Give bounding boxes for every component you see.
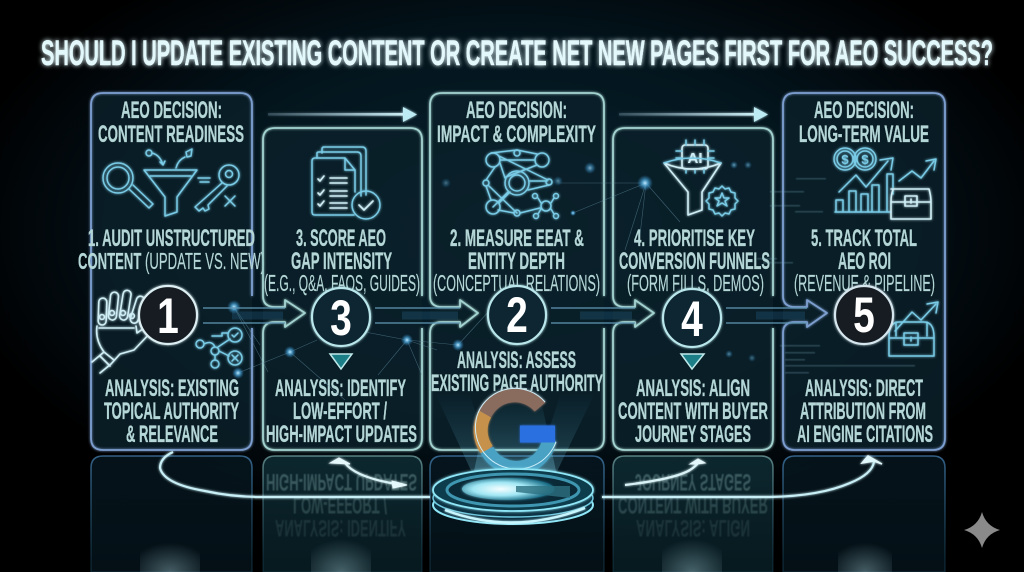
top flow arrow 2: [619, 107, 768, 122]
heading: AEO decision long-term value: [799, 97, 929, 148]
floor reflection of the panels: [91, 456, 945, 572]
analysis text 2: ANALYSIS: ASSESS: [457, 347, 576, 374]
step label 1: [78, 225, 265, 274]
analysis text 1: & RELEVANCE: [126, 421, 218, 448]
analysis text 1: ANALYSIS: EXISTING: [105, 375, 239, 402]
step label 4: CONVERSION FUNNELS: [619, 248, 770, 275]
icon: entity network: [483, 150, 558, 218]
analysis text 2: EXISTING PAGE AUTHORITY: [431, 370, 603, 397]
panel: step 1 content readiness: [78, 93, 265, 450]
analysis text 1: TOPICAL AUTHORITY: [104, 398, 239, 425]
step circle 1: [139, 286, 197, 344]
reflected text: panel 3: HIGH-IMPACT UPDATES: [266, 468, 417, 495]
reflected text: panel 3: ANALYSIS: IDENTIFY: [275, 514, 406, 541]
step circle 1: 1: [157, 287, 179, 344]
panel: step 4 conversion funnels: [613, 128, 773, 450]
step label 3: [264, 225, 420, 296]
triangle marker 4: [681, 354, 704, 369]
connector arrows between circles: [203, 308, 807, 323]
icon: coins, growth chart and chest: $: [861, 152, 869, 167]
heading: AEO decision impact and complexity: IMPACT & COMPLEXITY: [437, 121, 596, 148]
icon: glowing G logo: [475, 388, 556, 469]
heading: AEO decision content readiness: AEO DECISION:: [121, 97, 222, 124]
icon: robot hand: [92, 290, 154, 373]
step circle 3: [312, 288, 370, 346]
heading: AEO decision content readiness: [98, 97, 244, 148]
step circle 4: [663, 289, 721, 347]
reflected text: panel 3: LOW-EFFORT /: [293, 491, 387, 518]
step label 3: 3. SCORE AEO: [296, 225, 386, 252]
analysis text 3: [266, 375, 417, 448]
network lines and nodes: [227, 161, 756, 400]
step label 2: 2. MEASURE EEAT &: [450, 225, 584, 252]
step label 5: 5. TRACK TOTAL: [811, 225, 917, 252]
heading: AEO decision long-term value: LONG-TERM VALUE: [799, 121, 929, 148]
step label 3: (E.G., Q&A, FAQS, GUIDES): [264, 270, 420, 296]
analysis text 5: [797, 375, 933, 448]
analysis text 2: [431, 347, 603, 397]
curved return line right with arrow: [602, 456, 882, 497]
triangle marker 3: [330, 354, 352, 369]
analysis text 5: ANALYSIS: DIRECT: [805, 375, 923, 402]
icon: AI chip funnel and gear: [664, 140, 738, 216]
analysis text 4: JOURNEY STAGES: [635, 421, 751, 448]
step label 1: 1. AUDIT UNSTRUCTURED: [88, 225, 255, 252]
heading: AEO decision long-term value: AEO DECISION:: [814, 97, 914, 124]
reflected text: panel 4: CONTENT WITH BUYER: [618, 491, 768, 518]
icon: treasure chest with trend arrow: [889, 302, 938, 356]
step label 2: ENTITY DEPTH: [468, 248, 565, 275]
step label 2: (CONCEPTUAL RELATIONS): [433, 270, 600, 296]
analysis text 3: ANALYSIS: IDENTIFY: [275, 375, 406, 402]
step label 2: [433, 225, 600, 296]
step label 1: CONTENT (UPDATE VS. NEW): [78, 248, 265, 274]
icon: coins, growth chart and chest: $: [841, 152, 849, 167]
analysis text 4: ANALYSIS: ALIGN: [636, 375, 750, 402]
step label 4: 4. PRIORITISE KEY: [634, 225, 755, 252]
analysis text 1: [104, 375, 239, 448]
reflected text: panel 3: [266, 468, 417, 541]
step circle 2: [488, 286, 546, 344]
top flow arrow 1: [268, 107, 417, 122]
step label 4: [619, 225, 770, 296]
step label 5: [794, 225, 935, 296]
icon: workflow nodes: [196, 328, 242, 368]
icon: four-point sparkle watermark: [964, 512, 1000, 548]
step circle 3: 3: [330, 289, 352, 346]
step label 5: AEO ROI: [838, 248, 891, 275]
icon: coins, growth chart and chest: [834, 148, 936, 219]
heading: AEO decision impact and complexity: AEO DECISION:: [466, 97, 567, 124]
step label 3: GAP INTENSITY: [291, 248, 392, 275]
step circle 5: [835, 286, 893, 344]
reflected text: panel 4: JOURNEY STAGES: [635, 468, 751, 495]
holographic platform: [433, 469, 593, 524]
icon: checklist documents: [312, 147, 380, 219]
analysis text 3: LOW-EFFORT /: [293, 398, 387, 425]
analysis text 4: [618, 375, 768, 448]
panel: step 5 long-term value: [783, 93, 945, 450]
panel: step 3 gap intensity: [263, 128, 422, 450]
step circle 4: 4: [681, 290, 703, 347]
step circle 2: 2: [506, 286, 528, 343]
analysis text 3: HIGH-IMPACT UPDATES: [266, 421, 417, 448]
heading: AEO decision impact and complexity: [437, 97, 596, 148]
step circle 5: 5: [853, 286, 875, 343]
reflected text: panel 4: ANALYSIS: ALIGN: [636, 514, 750, 541]
analysis text 4: CONTENT WITH BUYER: [618, 398, 768, 425]
hologram beam: [436, 395, 594, 490]
faint data readouts: [757, 178, 915, 374]
curved return line left: [160, 452, 430, 497]
curved double arrow under panel 3: [330, 458, 407, 488]
step label 4: (FORM FILLS, DEMOS): [627, 270, 764, 296]
heading: AEO decision content readiness: CONTENT READINESS: [98, 121, 244, 148]
reflected text: panel 4: [618, 468, 768, 541]
curved arrow under panel 4: [625, 459, 705, 485]
icon: magnifier, funnel and key: [103, 149, 239, 216]
icon: AI chip funnel and gear: AI: [688, 150, 702, 167]
panel: step 2 impact and complexity: [430, 93, 604, 450]
